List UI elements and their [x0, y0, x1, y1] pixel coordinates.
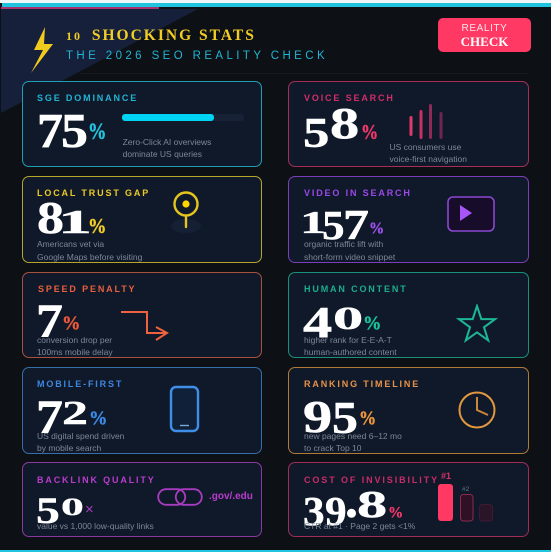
panel: cost of invisibility — [288, 462, 529, 537]
description: Google Maps before visiting — [37, 252, 142, 262]
panel: speed penalty: % — [62, 311, 80, 333]
description: US digital spend driven — [37, 431, 124, 441]
description: Americans vet via — [37, 239, 104, 249]
chart: rank bars — [438, 471, 493, 522]
panel: video in search: 7 — [343, 200, 369, 248]
panel: speed penalty — [22, 272, 262, 358]
panel: mobile-first: % — [88, 406, 107, 428]
panel: voice search — [288, 81, 529, 167]
icon: map pin — [171, 191, 201, 233]
label: HUMAN CONTENT — [304, 284, 408, 294]
stat: 75% — [37, 102, 106, 157]
description — [37, 335, 113, 357]
description — [304, 431, 402, 453]
panel: local trust gap: % — [88, 213, 106, 238]
label: COST OF INVISIBILITY — [304, 475, 439, 485]
panel: video in search: 1 — [300, 205, 326, 240]
description: US consumers use — [390, 142, 461, 152]
progress bar — [122, 114, 244, 121]
panel: local trust gap: 8 — [37, 191, 64, 243]
panel: voice search: % — [360, 119, 378, 144]
icon: drop arrow — [121, 311, 169, 341]
panel: SGE dominance: % — [88, 118, 106, 144]
panel: cost of invisibility: 3 — [303, 487, 325, 534]
link domains: .gov/.edu — [209, 491, 253, 502]
stat: 81% — [37, 191, 106, 243]
icon: lightning bolt — [31, 27, 53, 73]
panel: SGE dominance — [22, 81, 262, 167]
panel: cost of invisibility: 9 — [325, 487, 347, 534]
panel: ranking timeline: 5 — [332, 391, 358, 443]
panel: ranking timeline: % — [358, 406, 376, 428]
stat: 40% — [303, 296, 381, 346]
icon: video player — [447, 196, 495, 232]
panel: backlink quality: × — [85, 501, 94, 518]
panel: backlink quality — [22, 462, 262, 537]
panel: local trust gap: 1 — [58, 202, 92, 240]
chart: rank bars: #1 — [441, 471, 451, 481]
description: human-authored content — [304, 347, 397, 357]
icon: phone — [170, 386, 200, 432]
panel: video in search — [288, 176, 529, 263]
icon: sound bars — [410, 104, 442, 139]
icon: chain link — [157, 488, 203, 506]
panel: mobile-first: 2 — [62, 393, 88, 431]
description: conversion drop per — [37, 335, 112, 345]
chart: rank bars: #2 — [462, 486, 470, 493]
description: new pages need 6–12 mo — [304, 431, 402, 441]
label: SGE DOMINANCE — [37, 93, 138, 103]
description — [304, 335, 397, 357]
icon: clock — [458, 392, 496, 428]
bottom accent bar — [0, 550, 551, 552]
description: 100ms mobile delay — [37, 347, 113, 357]
stat: 7% — [36, 294, 80, 347]
label: RANKING TIMELINE — [304, 379, 420, 389]
description: organic traffic lift with — [304, 239, 383, 249]
badge: reality check: REALITY — [462, 23, 507, 34]
description — [304, 239, 396, 262]
panel: human content: % — [362, 311, 381, 333]
panel: cost of invisibility: . — [345, 470, 358, 528]
stat: 50x — [36, 489, 94, 531]
panel: video in search: % — [368, 217, 384, 237]
badge: reality check — [438, 18, 531, 52]
subtitle: THE 2026 SEO REALITY CHECK — [66, 50, 328, 62]
stat: 39.8% — [303, 470, 403, 534]
label: SPEED PENALTY — [38, 284, 136, 294]
title: 10 SHOCKING STATS — [66, 27, 256, 44]
description: CTR at #1 · Page 2 gets <1% — [304, 521, 415, 531]
label: VIDEO IN SEARCH — [304, 188, 412, 198]
panel: ranking timeline — [288, 367, 529, 454]
panel: video in search: 5 — [322, 201, 345, 248]
label: MOBILE-FIRST — [37, 379, 123, 389]
stat: 157% — [300, 200, 384, 248]
icon: star — [456, 304, 498, 343]
panel: voice search: 5 — [303, 108, 329, 156]
stat: 58% — [303, 97, 378, 156]
panel: ranking timeline: 9 — [303, 390, 332, 442]
panel: human content: 0 — [333, 299, 363, 336]
stat: 95% — [303, 390, 376, 443]
panel: mobile-first — [22, 367, 262, 454]
label: LOCAL TRUST GAP — [37, 188, 150, 198]
description — [37, 239, 142, 262]
description: to crack Top 10 — [304, 443, 362, 453]
stat: 72% — [36, 390, 107, 443]
panel: SGE dominance: 5 — [61, 102, 88, 157]
label: BACKLINK QUALITY — [37, 475, 156, 485]
panel: cost of invisibility: 8 — [357, 482, 387, 525]
description — [390, 142, 467, 164]
description — [122, 137, 212, 159]
panel: voice search: 8 — [330, 97, 359, 147]
panel: speed penalty: 7 — [36, 294, 63, 347]
panel: SGE dominance: 7 — [37, 102, 63, 157]
panel: backlink quality: 5 — [36, 489, 60, 531]
description: by mobile search — [37, 443, 101, 453]
panel: human content — [288, 272, 529, 358]
panel: backlink quality: 0 — [61, 492, 84, 520]
description: value vs 1,000 low-quality links — [37, 521, 154, 531]
description: short-form video snippet — [304, 252, 395, 262]
badge: reality check: CHECK — [461, 34, 508, 49]
panel: local trust gap — [22, 176, 262, 263]
description — [37, 431, 124, 453]
panel: cost of invisibility: % — [388, 502, 403, 520]
description: higher rank for E-E-A-T — [304, 335, 392, 345]
description: voice-first navigation — [390, 154, 467, 164]
panel: human content: 4 — [303, 296, 332, 346]
panel: mobile-first: 7 — [36, 390, 63, 443]
label: VOICE SEARCH — [304, 93, 395, 103]
description: Zero-Click AI overviews — [123, 137, 211, 147]
description: dominate US queries — [123, 149, 202, 159]
top accent bar — [0, 0, 551, 9]
